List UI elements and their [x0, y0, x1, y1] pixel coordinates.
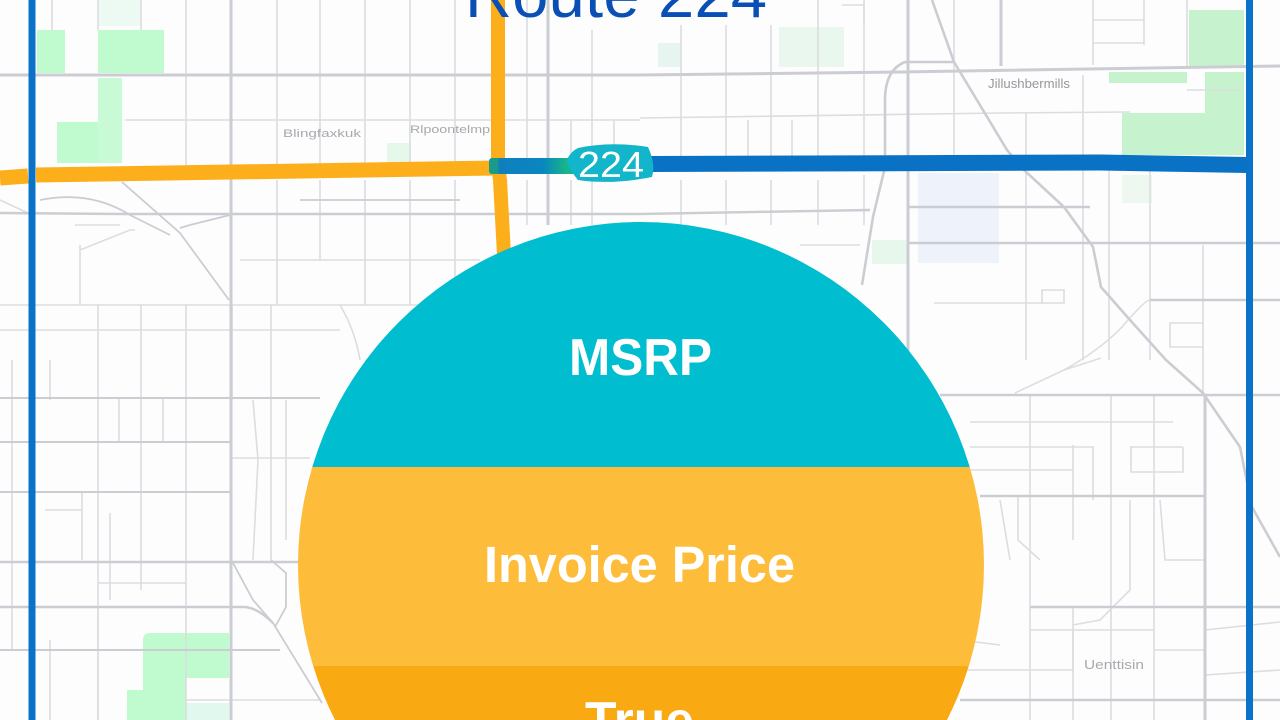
segment: MSRP [298, 222, 985, 467]
place label: Uenttisin [1084, 657, 1144, 672]
segment: Invoice Price [298, 467, 985, 666]
place label: Blingfaxkuk [283, 128, 362, 140]
map place labels [283, 76, 1144, 672]
route 224 badge [567, 144, 653, 185]
label: MSRP: MSRP [569, 329, 712, 387]
label: Invoice Price: Invoice Price [484, 536, 795, 593]
orange route [0, 0, 504, 255]
segment: True [298, 666, 985, 720]
blue route 224 [489, 158, 1248, 174]
price circle [298, 222, 985, 720]
place label: Jillushbermills [988, 76, 1070, 91]
route 224 badge: 224 [578, 144, 644, 185]
place label: Rlpoontelmp [410, 124, 490, 136]
